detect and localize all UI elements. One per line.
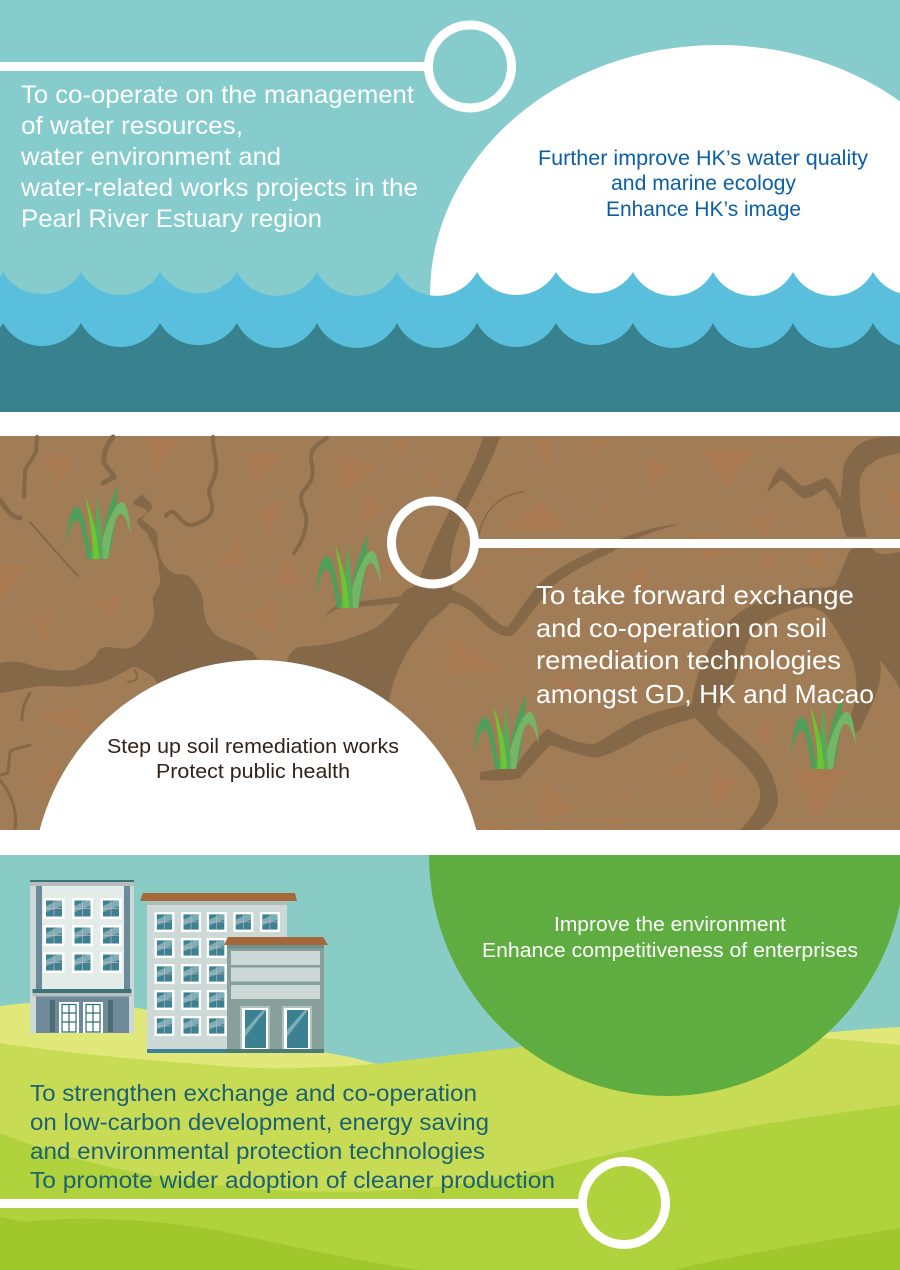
connector line and ring bbox=[392, 501, 900, 584]
text: water co-operation: water-related works projects in the bbox=[20, 174, 418, 202]
text: environment co-operation: To promote wider adoption of cleaner production bbox=[30, 1167, 555, 1193]
white dome: water benefit bbox=[430, 45, 900, 545]
text: water benefit bbox=[538, 147, 869, 221]
text: environment benefit bbox=[482, 913, 858, 962]
gap between soil and environment panels bbox=[0, 830, 900, 855]
hill: pale yellow bbox=[0, 1002, 900, 1080]
building: left tower bbox=[30, 880, 134, 1033]
text: water co-operation: To co-operate on the management bbox=[21, 81, 414, 109]
panel: water bbox=[0, 0, 900, 545]
text: soil benefit bbox=[107, 735, 399, 783]
text: water co-operation: of water resources, bbox=[21, 112, 243, 140]
text: environment co-operation: and environmental protection technologies bbox=[30, 1138, 485, 1164]
connector line and ring bbox=[0, 1162, 666, 1244]
text: water co-operation: water environment and bbox=[20, 143, 281, 171]
text: environment co-operation: To strengthen exchange and co-operation bbox=[30, 1080, 477, 1106]
green dome: environment benefit bbox=[429, 855, 900, 1096]
text: soil co-operation bbox=[536, 580, 874, 709]
soil cracks bbox=[0, 437, 900, 830]
white dome: soil benefit bbox=[32, 660, 484, 1118]
building: middle block bbox=[140, 893, 297, 1053]
panel: soil bbox=[0, 436, 900, 1118]
text: soil co-operation: amongst GD, HK and Macao bbox=[536, 679, 874, 709]
text: water benefit: Further improve HK’s water quality bbox=[538, 147, 869, 170]
text: soil co-operation: To take forward exchange bbox=[536, 580, 854, 610]
panel: environment bbox=[0, 855, 900, 1270]
text: environment co-operation bbox=[30, 1080, 555, 1193]
text: water co-operation: Pearl River Estuary region bbox=[21, 205, 322, 233]
hill: deep green bbox=[0, 1217, 900, 1270]
grass tuft 3 bbox=[474, 695, 539, 769]
text: soil co-operation: and co-operation on soil bbox=[536, 613, 827, 643]
text: environment co-operation: on low-carbon development, energy saving bbox=[30, 1109, 489, 1135]
text: soil benefit: Step up soil remediation works bbox=[107, 735, 399, 758]
waves: lower dark layer bbox=[0, 323, 900, 412]
hill: mid green bbox=[0, 1105, 900, 1270]
text: water co-operation bbox=[20, 81, 418, 233]
hill: light green bbox=[0, 1038, 900, 1270]
grass tuft 4 bbox=[791, 695, 856, 769]
grass tuft 2 bbox=[316, 534, 381, 608]
grass tuft 1 bbox=[66, 485, 131, 559]
text: environment benefit: Improve the environment bbox=[554, 913, 786, 936]
connector line and ring bbox=[0, 25, 512, 108]
text: environment benefit: Enhance competitiveness of enterprises bbox=[482, 939, 858, 962]
building: front block bbox=[224, 937, 328, 1053]
soil triangles bbox=[0, 437, 900, 830]
text: soil co-operation: remediation technologies bbox=[536, 645, 841, 675]
text: water benefit: and marine ecology bbox=[611, 172, 797, 195]
waves: upper blue layer bbox=[0, 272, 900, 412]
thin cracks bbox=[0, 437, 523, 830]
text: soil benefit: Protect public health bbox=[156, 760, 350, 783]
text: water benefit: Enhance HK’s image bbox=[606, 198, 801, 221]
